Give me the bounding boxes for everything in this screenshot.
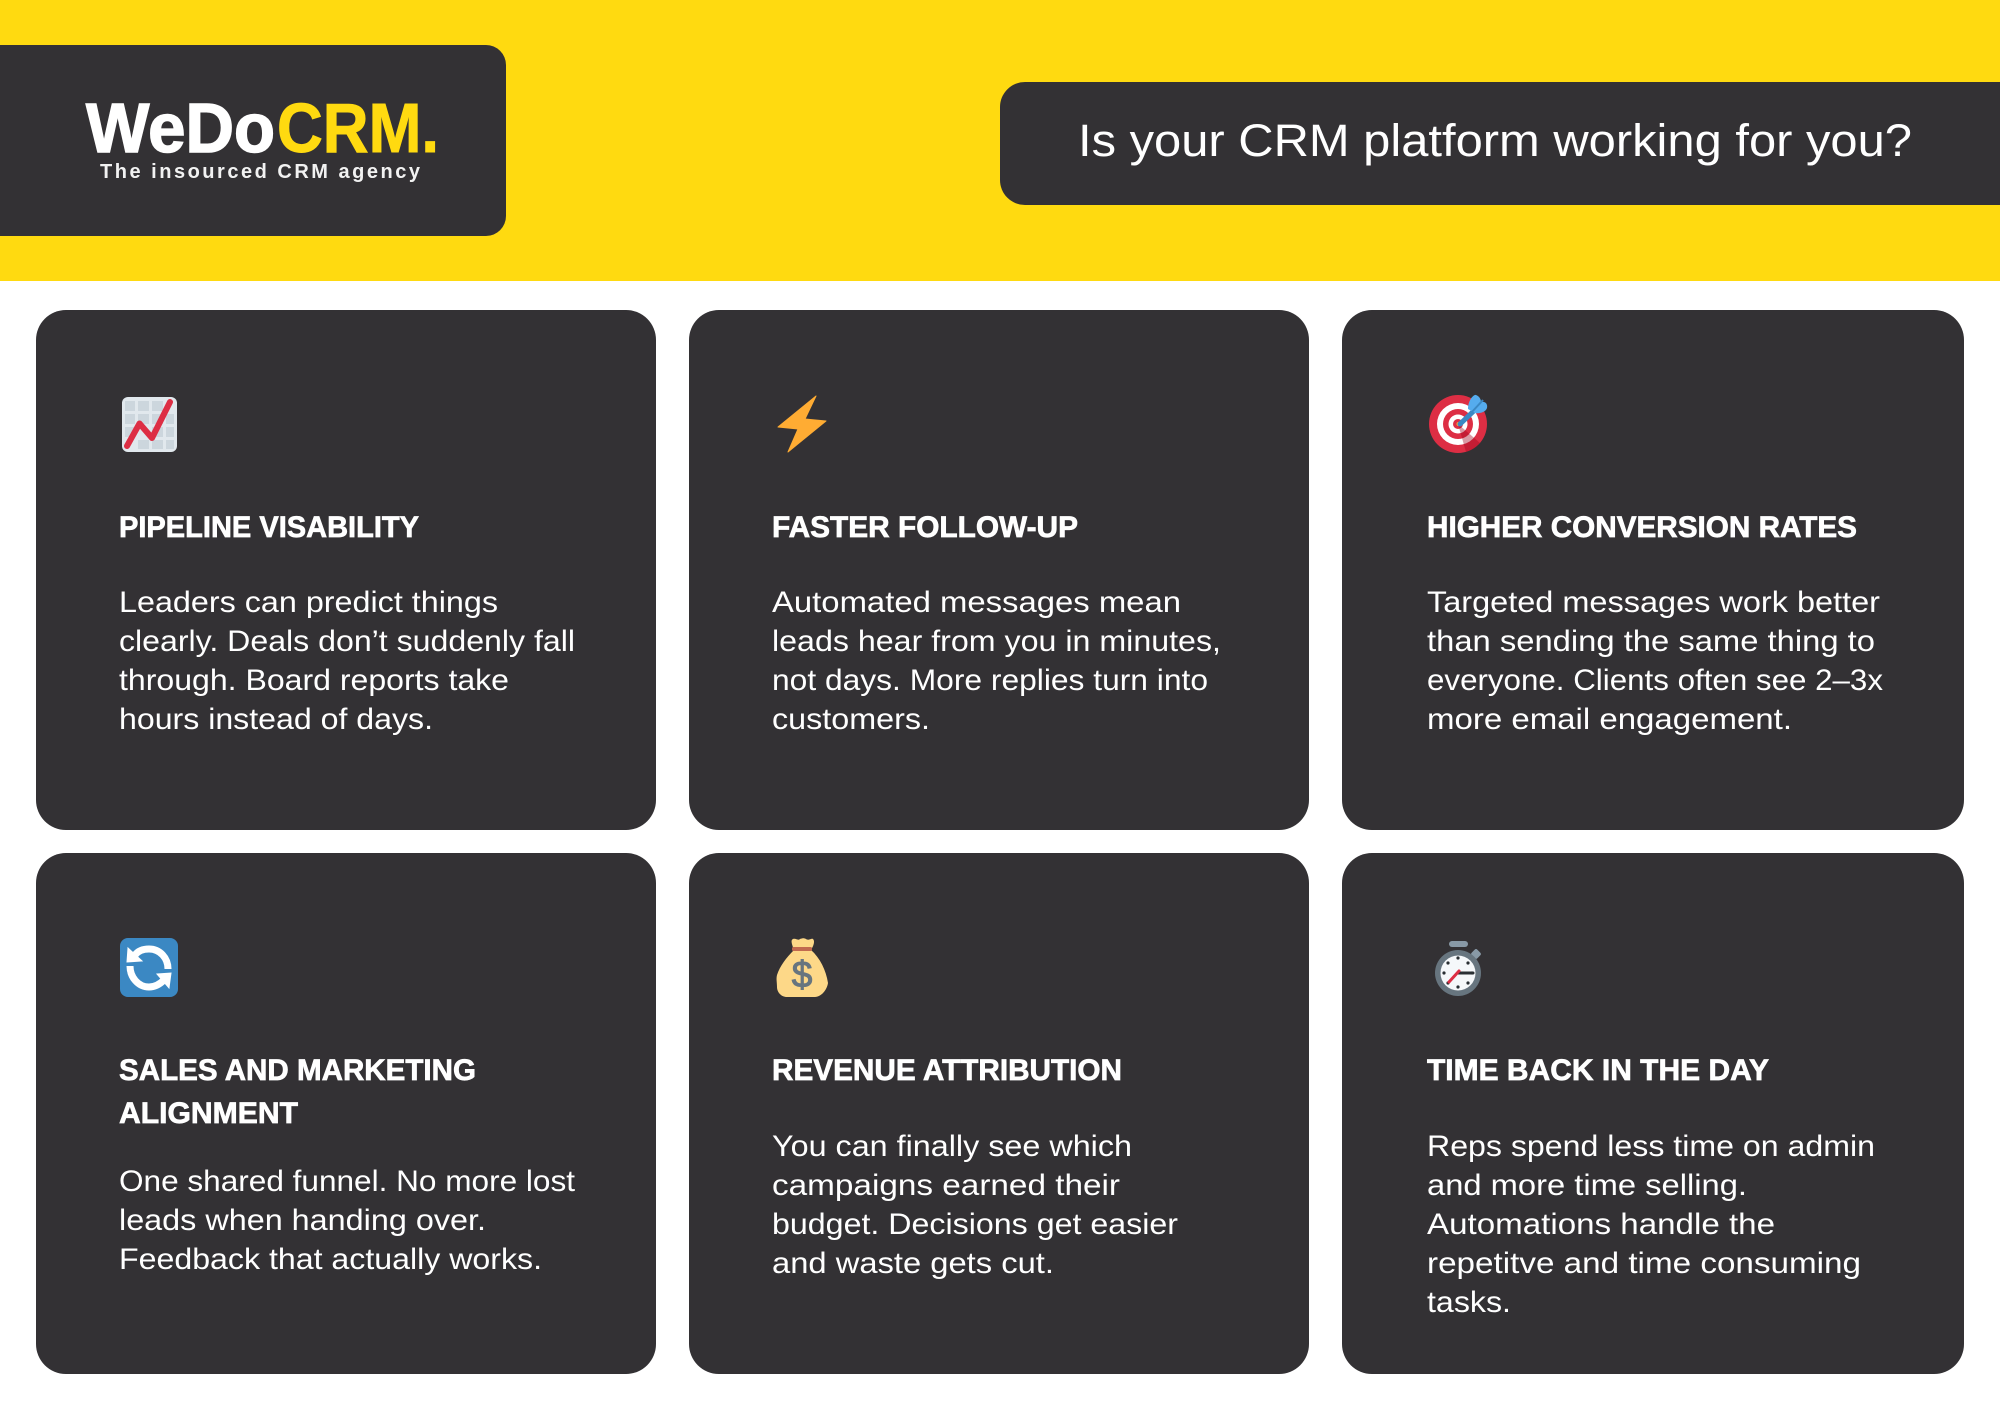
heading: SALES AND MARKETING	[119, 1054, 476, 1087]
panel: faster follow-up	[689, 310, 1309, 830]
body text: Automations handle the	[1427, 1208, 1775, 1241]
logo wordmark	[86, 89, 439, 167]
body text: everyone. Clients often see 2–3x	[1427, 664, 1883, 697]
body text: leads hear from you in minutes,	[772, 625, 1221, 658]
body text: leads when handing over.	[119, 1204, 486, 1237]
body text: tasks.	[1427, 1286, 1511, 1319]
heading: TIME BACK IN THE DAY	[1427, 1054, 1769, 1087]
body text	[119, 1165, 576, 1276]
body text: You can finally see which	[772, 1130, 1132, 1163]
logo wordmark: CRM.	[277, 89, 439, 167]
heading: FASTER FOLLOW-UP	[772, 511, 1078, 544]
icon: chart increasing	[122, 397, 177, 452]
header band	[0, 0, 2000, 281]
body text: not days. More replies turn into	[772, 664, 1208, 697]
panel: sales and marketing alignment	[36, 853, 656, 1374]
body text: more email engagement.	[1427, 703, 1792, 736]
heading	[119, 1054, 476, 1130]
body text: hours instead of days.	[119, 703, 433, 736]
body text: budget. Decisions get easier	[772, 1208, 1178, 1241]
panel: time back in the day	[1342, 853, 1964, 1374]
body text	[119, 586, 575, 736]
heading: HIGHER CONVERSION RATES	[1427, 511, 1857, 544]
logo panel	[0, 45, 506, 236]
title panel	[1000, 82, 2000, 205]
icon: money bag	[777, 938, 828, 997]
body text: One shared funnel. No more lost	[119, 1165, 576, 1198]
icon: money bag: $	[792, 954, 812, 995]
icon: stopwatch	[1435, 941, 1482, 996]
heading: REVENUE ATTRIBUTION	[772, 1054, 1122, 1087]
body text: campaigns earned their	[772, 1169, 1120, 1202]
body text: through. Board reports take	[119, 664, 509, 697]
body text: Leaders can predict things	[119, 586, 498, 619]
body text	[1427, 1130, 1875, 1319]
icon: lightning bolt	[778, 396, 826, 452]
body text	[772, 1130, 1178, 1280]
body text: repetitve and time consuming	[1427, 1247, 1861, 1280]
panel: revenue attribution	[689, 853, 1309, 1374]
body text: customers.	[772, 703, 930, 736]
title: Is your CRM platform working for you?	[1078, 115, 1912, 166]
body text	[772, 586, 1221, 736]
panel: pipeline visibility	[36, 310, 656, 830]
panel: higher conversion rates	[1342, 310, 1964, 830]
body text: clearly. Deals don’t suddenly fall	[119, 625, 575, 658]
body text: Targeted messages work better	[1427, 586, 1880, 619]
icon: bullseye target	[1429, 395, 1487, 453]
heading: ALIGNMENT	[119, 1097, 298, 1130]
body text: and waste gets cut.	[772, 1247, 1054, 1280]
body text	[1427, 586, 1883, 736]
logo tagline: The insourced CRM agency	[100, 161, 421, 183]
body text: Automated messages mean	[772, 586, 1181, 619]
body text: Feedback that actually works.	[119, 1243, 542, 1276]
body text: than sending the same thing to	[1427, 625, 1875, 658]
body text: and more time selling.	[1427, 1169, 1747, 1202]
icon: sync arrows	[120, 938, 178, 997]
heading: PIPELINE VISABILITY	[119, 511, 419, 544]
logo wordmark: WeDo	[86, 89, 275, 167]
body text: Reps spend less time on admin	[1427, 1130, 1875, 1163]
